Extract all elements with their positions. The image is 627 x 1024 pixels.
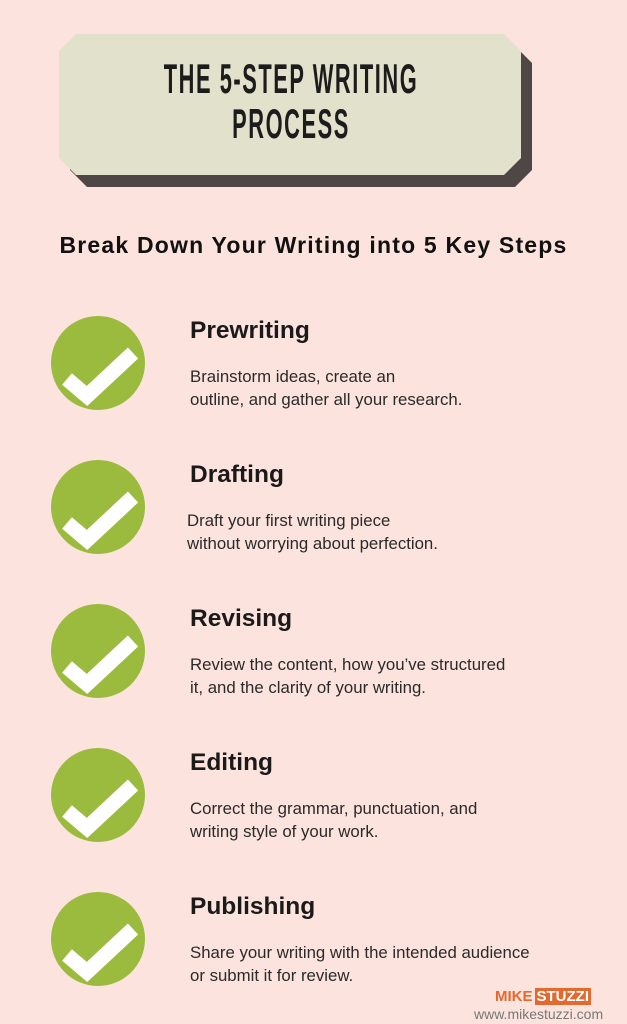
- step 1: prewriting: [51, 316, 462, 410]
- logo: [474, 988, 603, 1022]
- description: Correct the grammar, punctuation, and: [190, 799, 477, 818]
- logo: MIKE STUZZI: [495, 988, 589, 1005]
- description: Review the content, how you’ve structured: [190, 655, 505, 674]
- heading: Publishing: [190, 893, 315, 920]
- heading: Prewriting: [190, 317, 310, 344]
- description: Brainstorm ideas, create an: [190, 367, 395, 386]
- icon: check circle: [51, 460, 145, 554]
- step 5: publishing: [51, 892, 530, 986]
- title text: THE 5-STEP WRITING: [164, 55, 418, 102]
- description: it, and the clarity of your writing.: [190, 678, 426, 697]
- description: [190, 799, 477, 841]
- step 4: editing: [51, 748, 477, 842]
- description: [190, 655, 505, 697]
- heading: Drafting: [190, 461, 284, 488]
- heading: Revising: [190, 605, 292, 632]
- icon: check circle: [51, 748, 145, 842]
- subtitle: Break Down Your Writing into 5 Key Steps: [59, 232, 568, 258]
- description: Share your writing with the intended audience: [190, 943, 530, 962]
- title banner: [59, 34, 532, 187]
- step 3: revising: [51, 604, 505, 698]
- icon: check circle: [51, 892, 145, 986]
- heading: Editing: [190, 749, 273, 776]
- description: [190, 943, 530, 985]
- step 2: drafting: [51, 460, 438, 554]
- description: [187, 511, 438, 553]
- description: outline, and gather all your research.: [190, 390, 462, 409]
- description: [190, 367, 462, 409]
- icon: check circle: [51, 316, 145, 410]
- description: writing style of your work.: [190, 822, 378, 841]
- title text: [164, 55, 418, 147]
- description: or submit it for review.: [190, 966, 353, 985]
- logo: www.mikestuzzi.com: [474, 1006, 603, 1022]
- title text: PROCESS: [232, 100, 350, 147]
- description: Draft your first writing piece: [187, 511, 390, 530]
- icon: check circle: [51, 604, 145, 698]
- description: without worrying about perfection.: [187, 534, 438, 553]
